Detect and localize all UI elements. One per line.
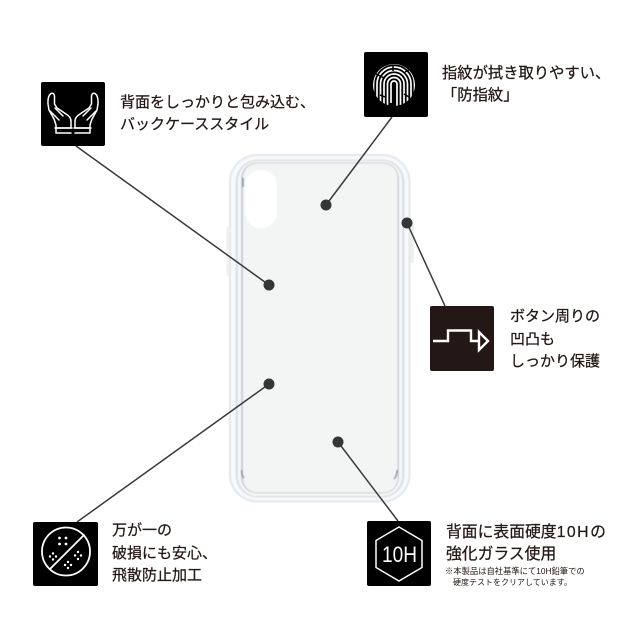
text: button protection: しっかり保護: [510, 353, 600, 370]
icon: hands: [41, 82, 105, 146]
camera cutout: [245, 170, 277, 228]
leader line: back case: [76, 146, 274, 290]
text: shatter prevention: [112, 522, 217, 584]
leader line: shatter: [77, 378, 274, 522]
icon: fingerprint: [364, 52, 428, 117]
text: shatter prevention: 飛散防止加工: [112, 567, 202, 584]
footnote: [445, 566, 585, 587]
leader line: hardness: [332, 436, 398, 521]
text: button protection: [510, 308, 600, 370]
text: anti-fingerprint: [442, 64, 610, 104]
text: shatter prevention: 破損にも安心、: [112, 544, 217, 562]
text: 10H hardness: 強化ガラス使用: [446, 546, 556, 562]
text: button protection: ボタン周りの: [510, 308, 600, 325]
text: 10H hardness: 背面に表面硬度10Hの: [446, 524, 606, 541]
leader line: fingerprint: [320, 117, 392, 210]
text: anti-fingerprint: 指紋が拭き取りやすい、: [442, 65, 610, 82]
icon: 10H hexagon: [367, 521, 431, 586]
icon: shatter prevention: [33, 522, 98, 586]
footnote: 硬度テストをクリアしています。: [453, 578, 572, 587]
text: button protection: 凹凸も: [510, 331, 555, 348]
text: anti-fingerprint: 「防指紋」: [442, 87, 518, 104]
icon: button step arrow: [430, 306, 494, 371]
footnote: ※本製品は自社基準にて10H鉛筆での: [445, 566, 585, 576]
text: back case style: バックケーススタイル: [120, 116, 269, 133]
side buttons: [226, 221, 414, 276]
phone case: [226, 154, 414, 502]
leader line: button: [402, 218, 445, 306]
text: back case style: [120, 94, 315, 133]
inner corner shadows: [242, 178, 397, 479]
text: back case style: 背面をしっかりと包み込む、: [120, 94, 315, 111]
text: 10H hardness: [446, 523, 606, 562]
icon: 10H hexagon: 10H: [382, 542, 417, 567]
text: shatter prevention: 万が一の: [112, 522, 172, 539]
